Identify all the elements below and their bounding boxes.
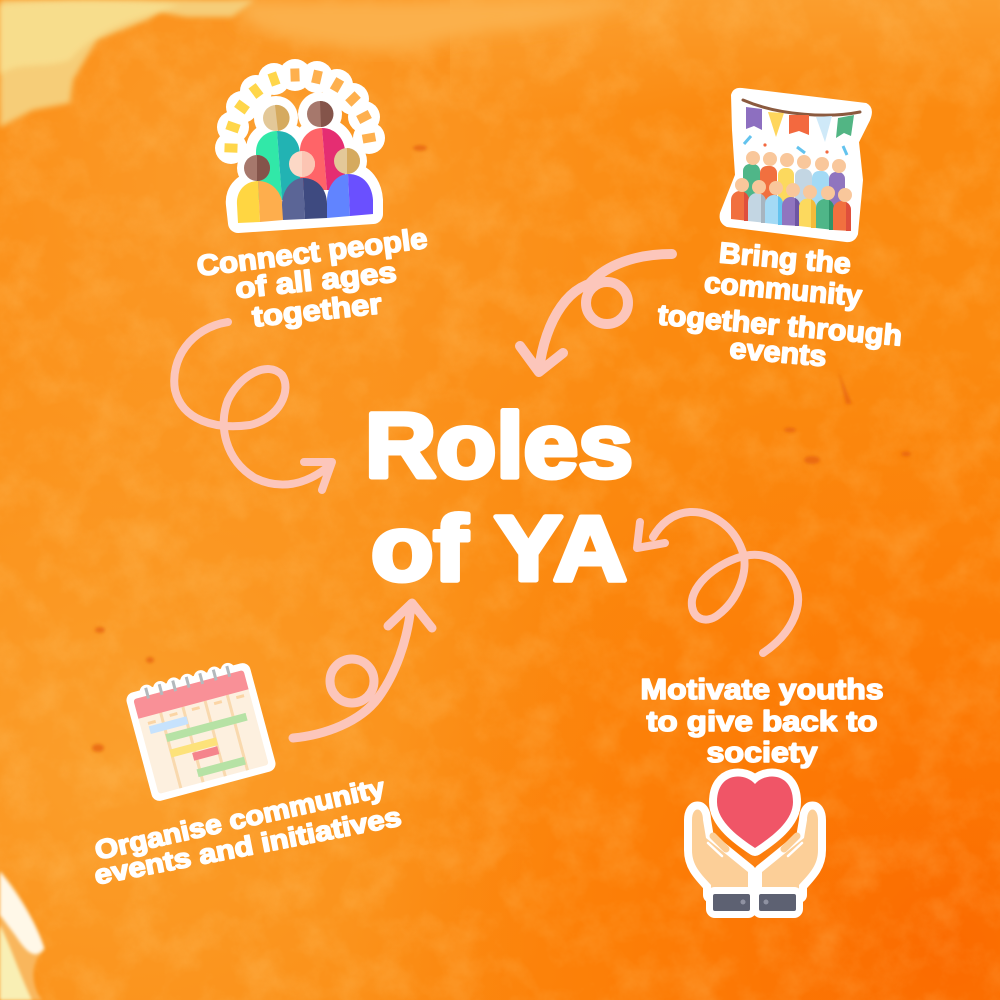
label: organise community: [92, 772, 404, 891]
label: connect people: together: [251, 288, 383, 334]
person heads: [244, 101, 360, 181]
background: ink specks: [92, 145, 911, 752]
crowd front row: [731, 178, 852, 231]
sticker outline: [215, 59, 385, 223]
calendar header: [133, 670, 249, 719]
label: bring the community: events: [728, 333, 828, 373]
label: connect people: of all ages: [234, 257, 398, 305]
label: organise community: events and initiatives: [92, 802, 404, 891]
label: motivate youths: [640, 674, 884, 769]
arrow: bottom right: [637, 512, 798, 653]
arrow: top right: [520, 254, 672, 372]
icon: hands holding heart sticker: [692, 777, 818, 911]
sun rays: [224, 71, 280, 153]
icon: calendar sticker: [124, 657, 277, 803]
arrow: bottom left: [293, 603, 432, 738]
title: of YA: [371, 498, 627, 600]
label: bring the community: together through: [656, 299, 903, 353]
arrow: top left: [174, 322, 332, 490]
calendar page: [133, 670, 269, 794]
label: motivate youths: society: [706, 737, 818, 769]
label: motivate youths: Motivate youths: [640, 674, 884, 706]
label: bring the community: community: [703, 267, 863, 313]
icon: group of people sticker: [215, 59, 385, 223]
icon: crowd and bunting sticker: [721, 89, 871, 241]
heart: [717, 777, 793, 848]
label: connect people: Connect people: [195, 223, 429, 283]
label: connect people: [195, 223, 429, 334]
calendar rings: [138, 661, 236, 700]
crowd back row: [743, 151, 846, 215]
label: bring the community: [656, 237, 903, 373]
label: motivate youths: to give back to: [646, 706, 878, 738]
label: bring the community: Bring the: [718, 237, 852, 281]
title: Roles: [365, 395, 633, 497]
label: organise community: Organise community: [92, 772, 388, 866]
cuffs: [713, 894, 750, 911]
hands: [692, 810, 748, 895]
title: [365, 395, 633, 600]
